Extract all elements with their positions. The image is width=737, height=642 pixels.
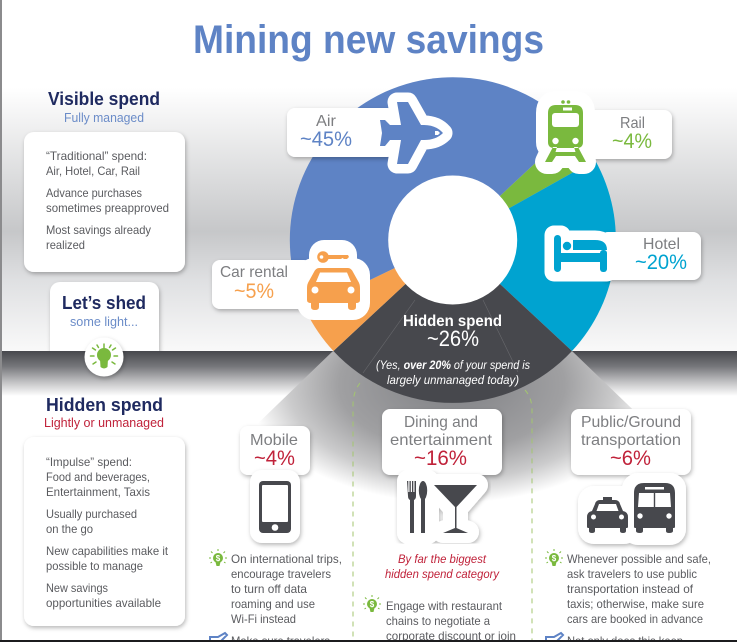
tip text: taxis; otherwise, make sure <box>567 597 704 611</box>
card text <box>46 455 169 610</box>
icon: checkbox <box>210 633 227 642</box>
hidden spend pie label: largely unmanaged today) <box>387 373 519 387</box>
subheading: Fully managed <box>64 110 144 125</box>
card <box>24 132 185 272</box>
card text: Entertainment, Taxis <box>46 485 150 499</box>
card text: Air, Hotel, Car, Rail <box>46 164 140 178</box>
icon: bed <box>554 235 607 272</box>
dining callout <box>385 552 500 581</box>
panel: air label: ~45% <box>300 127 352 151</box>
card text: “Impulse” spend: <box>46 455 132 469</box>
let's shed text: some light... <box>70 314 138 329</box>
tip text: roaming and use <box>231 597 315 611</box>
bottom edge strip <box>0 640 737 642</box>
dining label <box>382 409 502 475</box>
panel: hotel label: Hotel <box>643 236 680 253</box>
panel: air label: Air <box>316 113 337 130</box>
dining label: entertainment <box>390 432 493 449</box>
tip text: encourage travelers <box>231 567 331 581</box>
panel: rail label: Rail <box>620 115 645 132</box>
pie centre hole <box>388 176 517 304</box>
tip text <box>386 599 516 642</box>
card text: sometimes preapproved <box>46 201 169 215</box>
column: public transport <box>545 409 711 642</box>
icon: airplane <box>380 102 443 164</box>
panel: rail label: ~4% <box>612 129 652 153</box>
subheading: Lightly or unmanaged <box>44 415 164 430</box>
tip text: Wi-Fi instead <box>231 612 296 626</box>
dining label: ~16% <box>414 446 467 470</box>
icon: savings tip: $ <box>216 554 221 563</box>
tip text: Whenever possible and safe, <box>567 552 711 566</box>
card text: Advance purchases <box>46 186 142 200</box>
tip text: chains to negotiate a <box>386 614 490 628</box>
dining callout: hidden spend category <box>385 567 500 581</box>
icon: taxi and bus <box>578 473 686 545</box>
panel: car rental label <box>212 260 312 309</box>
transport label <box>571 409 691 475</box>
slice: air 45% <box>290 77 572 311</box>
panel: air label <box>287 108 395 157</box>
icon: savings tip: $ <box>552 554 557 563</box>
mobile label: Mobile <box>250 432 298 449</box>
page background <box>0 0 737 351</box>
card text: “Traditional” spend: <box>46 149 147 163</box>
tip text <box>567 552 711 642</box>
icon: savings tip <box>363 595 381 612</box>
heading: Hidden spend <box>46 394 163 415</box>
slice: car rental 5% <box>306 240 453 351</box>
panel: car rental label: Car rental <box>220 264 288 281</box>
heading: Visible spend <box>48 88 160 109</box>
title: Mining new savings <box>193 18 544 62</box>
tip text: cars are booked in advance <box>567 612 703 626</box>
pie chart <box>290 77 616 403</box>
hidden spend pie label: Hidden spend <box>403 313 502 330</box>
dining callout: By far the biggest <box>398 552 487 566</box>
column: mobile <box>209 426 342 642</box>
icon: savings tip: $ <box>370 600 375 609</box>
light cone under hidden slice <box>225 351 680 505</box>
icon: savings tip <box>209 549 227 566</box>
let's shed text <box>62 292 146 329</box>
icon: checkbox <box>546 633 563 642</box>
slice: hotel 20% <box>453 160 616 351</box>
card text: realized <box>46 238 85 252</box>
dashed callout lines for dining column <box>353 300 532 640</box>
card text: opportunities available <box>46 596 161 610</box>
card text: Most savings already <box>46 223 151 237</box>
panel: hotel label <box>600 232 701 280</box>
card text: New savings <box>46 581 108 595</box>
card text: Usually purchased <box>46 507 137 521</box>
icon: train <box>545 100 586 162</box>
tip text: Engage with restaurant <box>386 599 503 613</box>
dining label: Dining and <box>404 414 478 431</box>
column: dining <box>363 409 516 642</box>
panel: visible spend <box>24 88 185 272</box>
tip text <box>231 552 342 642</box>
tip text: transportation instead of <box>567 582 694 596</box>
icon: light bulb <box>84 338 124 376</box>
tip text: On international trips, <box>231 552 342 566</box>
left edge strip <box>0 0 2 642</box>
icon: car and key <box>297 240 370 320</box>
panel: car rental label: ~5% <box>234 279 274 303</box>
transport label: transportation <box>581 432 681 449</box>
icon: fork, spoon and glass <box>407 481 477 533</box>
hidden spend pie label: ~26% <box>427 326 479 351</box>
tip text: ask travelers to use public <box>567 567 697 581</box>
icon: savings tip <box>545 549 563 566</box>
card text: Food and beverages, <box>46 470 150 484</box>
slice: rail 4% <box>453 129 595 240</box>
transport label: Public/Ground <box>581 414 681 431</box>
tip text: to turn off data <box>231 582 307 596</box>
panel: rail label <box>585 110 672 159</box>
icon: phone <box>250 470 300 543</box>
hidden spend pie label <box>376 313 530 387</box>
transport label: ~6% <box>610 446 651 470</box>
slice: hidden 26% <box>333 240 572 403</box>
dark band <box>0 351 737 396</box>
card text: on the go <box>46 522 93 536</box>
card text: New capabilities make it <box>46 544 169 558</box>
card text <box>46 149 169 252</box>
card <box>24 437 185 626</box>
hidden spend pie label: (Yes, over 20% of your spend is <box>376 358 530 372</box>
mobile label <box>240 426 310 475</box>
panel: hidden spend <box>24 394 185 626</box>
let's shed text: Let’s shed <box>62 292 146 313</box>
mobile label: ~4% <box>254 446 295 470</box>
panel: hotel label: ~20% <box>635 250 687 274</box>
panel: let's shed card <box>50 282 159 372</box>
card text: possible to manage <box>46 559 143 573</box>
